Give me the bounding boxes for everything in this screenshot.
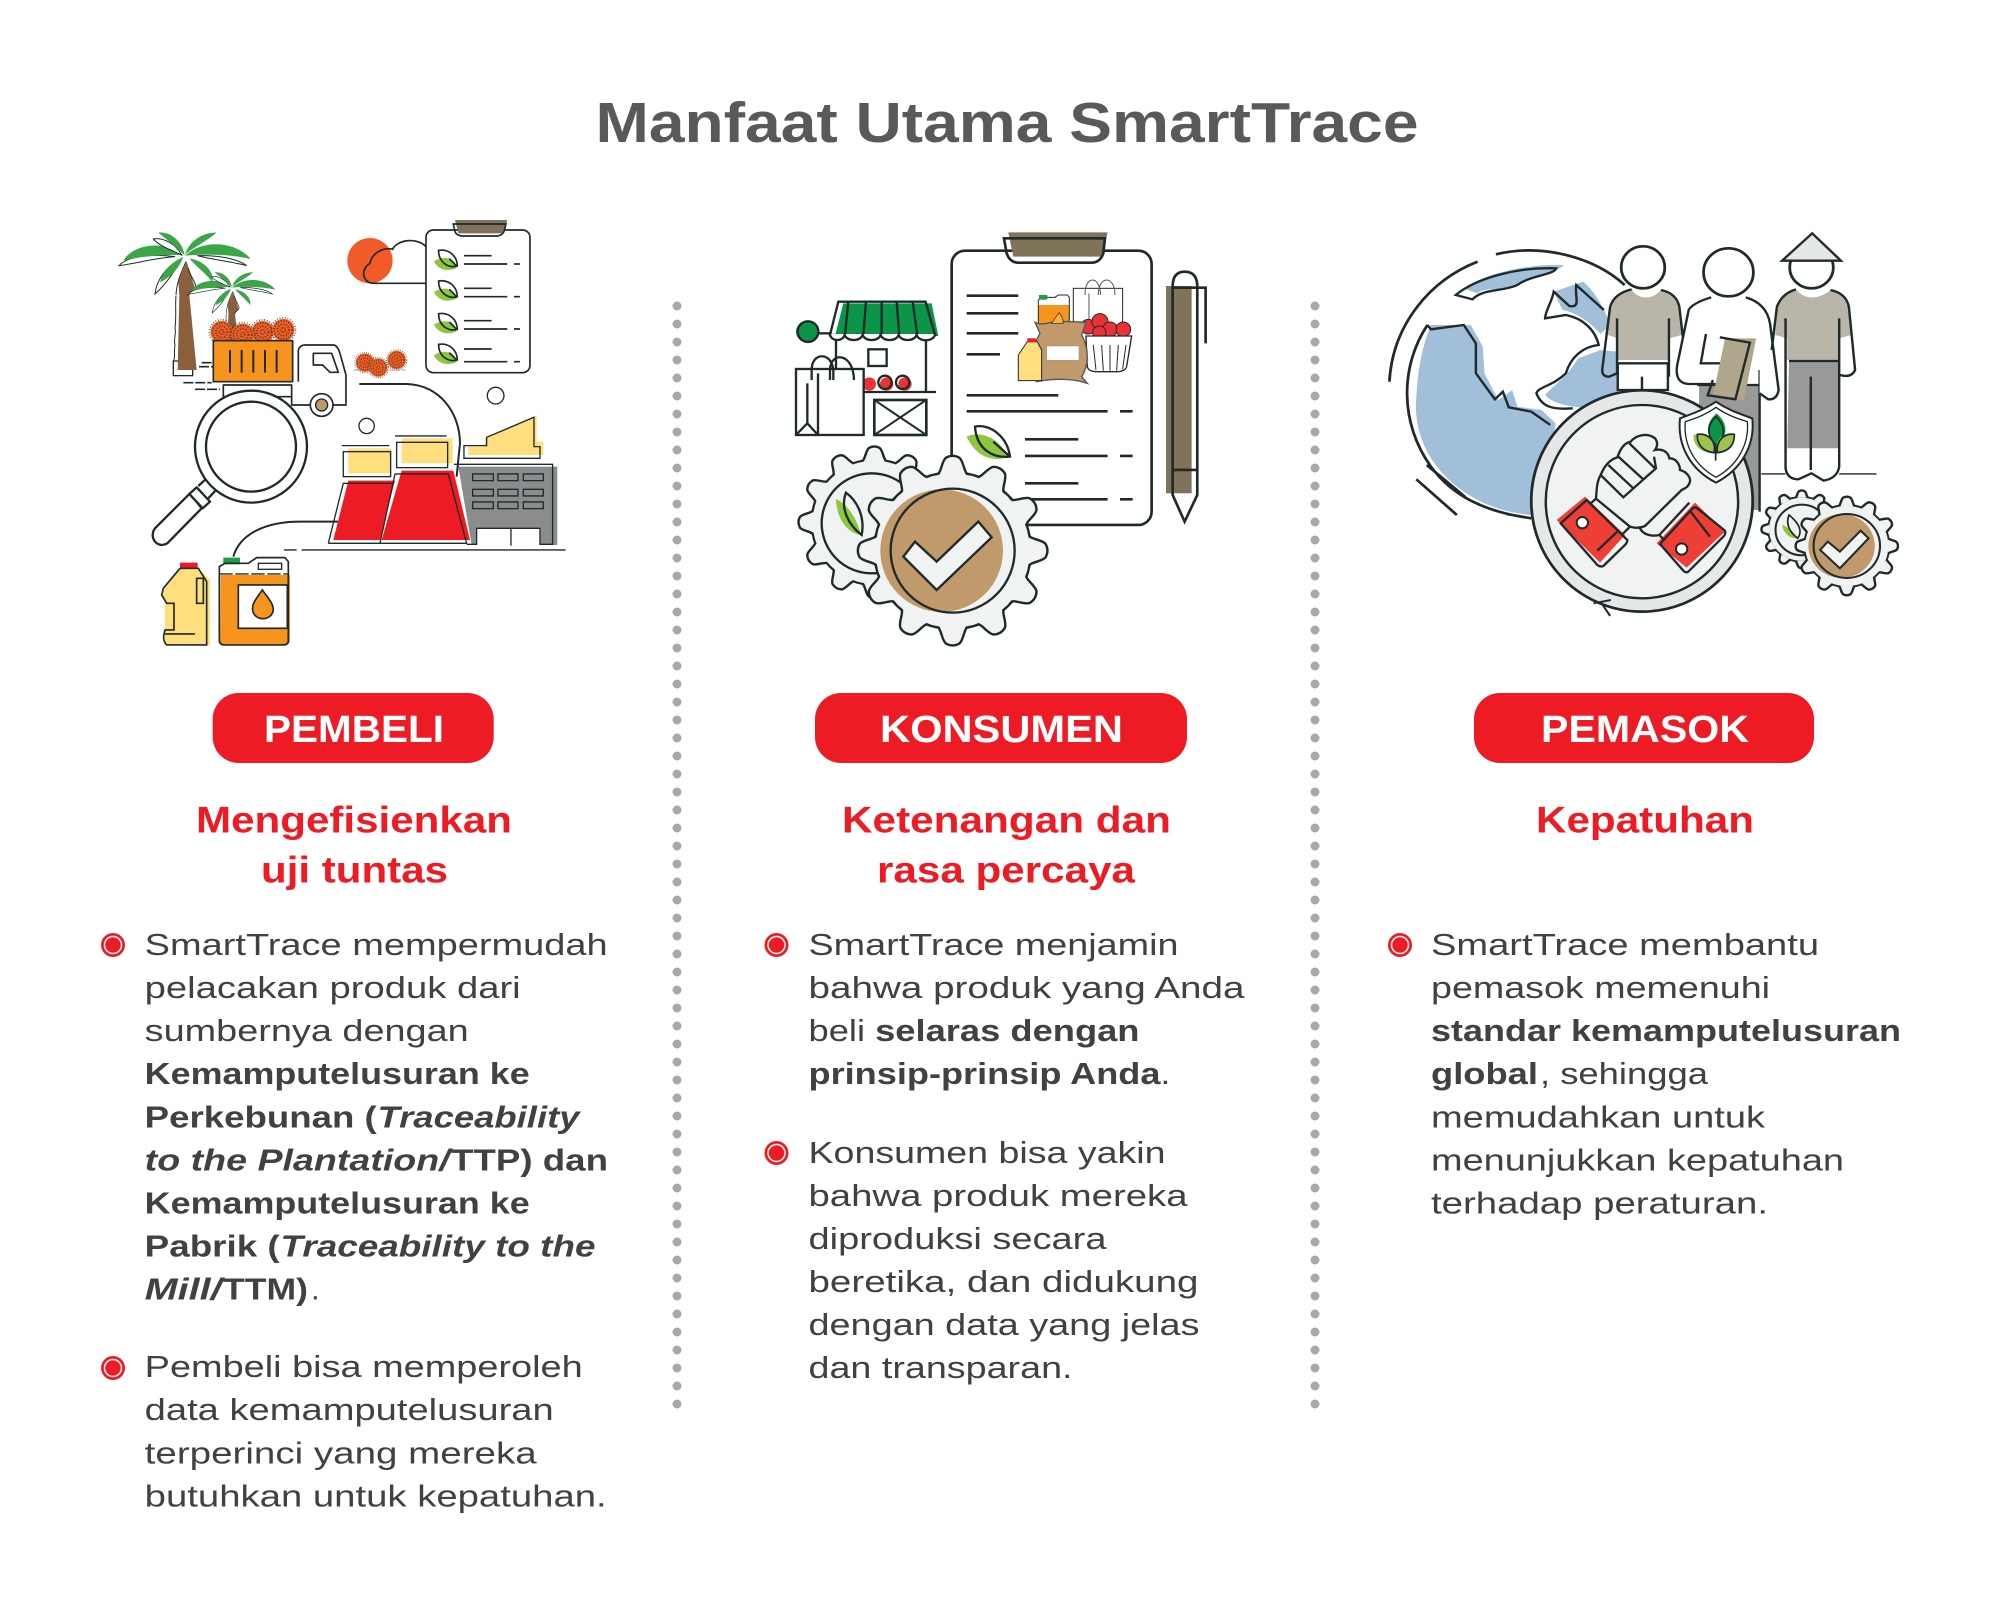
heading: mengefisienkan uji tuntas: uji tuntas — [261, 850, 448, 890]
bullet: konsumen 2: dengan data yang jelas — [808, 1307, 1200, 1342]
badge: konsumen: KONSUMEN — [880, 709, 1123, 751]
bullet: konsumen 2: beretika, dan didukung — [808, 1264, 1198, 1299]
icon: market stall — [796, 302, 938, 435]
bullet: pembeli 1: SmartTrace mempermudah — [145, 927, 608, 962]
icon: sun and cloud — [347, 238, 426, 283]
icon: connector pipes — [233, 384, 504, 557]
icon: cooking oil bottle — [162, 563, 210, 645]
bullet: pembeli 2: data kemamputelusuran — [145, 1392, 554, 1427]
illustration: palm oil supply chain — [119, 220, 566, 645]
bullet: pemasok 1 — [1388, 927, 1901, 1220]
panel: konsumen — [764, 232, 1245, 1385]
bullet: pemasok 1: SmartTrace membantu — [1431, 927, 1819, 962]
bullet: konsumen 2: Konsumen bisa yakin — [808, 1135, 1166, 1170]
heading: ketenangan dan rasa percaya: Ketenangan dan — [842, 800, 1171, 840]
icon: right cuff — [1657, 503, 1725, 572]
bullet: pembeli 1: Pabrik ( — [145, 1228, 280, 1264]
divider: right dotted line — [1310, 306, 1320, 1408]
bullet: pembeli 2: butuhkan untuk kepatuhan. — [145, 1478, 607, 1514]
bullet: konsumen 2: diproduksi secara — [808, 1221, 1107, 1256]
bullet: konsumen 1 — [764, 927, 1245, 1091]
bullet: pembeli 1: sumbernya dengan — [145, 1013, 469, 1048]
icon: globe — [1389, 250, 1625, 518]
bullet: pembeli 1: Traceability to the — [280, 1228, 596, 1264]
bullet: pemasok 1: memudahkan untuk — [1431, 1100, 1766, 1134]
bullet: pemasok 1: global — [1431, 1056, 1538, 1091]
icon: small gears with check mark — [1761, 490, 1898, 595]
bullet: konsumen 2 — [764, 1135, 1200, 1385]
bullet: pemasok 1: , sehingga — [1540, 1056, 1709, 1091]
bullet: pembeli 1: . — [311, 1272, 320, 1306]
bullet: pembeli 1: Kemamputelusuran ke — [145, 1186, 530, 1220]
bullet: konsumen 1: beli selaras dengan — [808, 1013, 1140, 1048]
bullet: pembeli 1 — [101, 927, 608, 1306]
panel: pembeli — [101, 220, 608, 1513]
icon: magnifying glass — [153, 391, 307, 545]
icon: sustainability shield — [1680, 402, 1753, 483]
badge: konsumen — [815, 693, 1187, 763]
bullet: konsumen 1: SmartTrace menjamin — [808, 927, 1178, 962]
bullet: konsumen 1: prinsip-prinsip Anda . — [808, 1056, 1170, 1091]
title: Manfaat Utama SmartTrace — [596, 91, 1418, 155]
icon: left cuff — [1557, 497, 1627, 566]
bullet: pemasok 1: terhadap peraturan. — [1431, 1186, 1768, 1220]
icon: oil jerry can — [219, 558, 290, 645]
bullet: konsumen 2: bahwa produk mereka — [808, 1178, 1188, 1213]
bullet: pemasok 1: menunjukkan kepatuhan — [1431, 1142, 1844, 1178]
icon: partnership circle — [1531, 390, 1753, 616]
bullet: konsumen 2: dan transparan. — [808, 1350, 1072, 1385]
heading: ketenangan dan rasa percaya — [842, 800, 1171, 890]
heading: kepatuhan: Kepatuhan — [1536, 800, 1754, 840]
icon: front gear with check mark — [858, 456, 1047, 645]
icon: pen — [1166, 272, 1206, 522]
bullet: pembeli 2: terperinci yang mereka — [145, 1436, 538, 1470]
bullet: konsumen 1: bahwa produk yang Anda — [808, 970, 1245, 1005]
bullet: pembeli 2: Pembeli bisa memperoleh — [145, 1349, 583, 1384]
badge: pemasok — [1474, 693, 1814, 763]
illustration: global suppliers — [1389, 233, 1898, 616]
icon: product group — [1018, 280, 1132, 383]
illustration: traceable products — [796, 232, 1206, 645]
icon: clasped hands — [1590, 435, 1690, 540]
icon: palm trees — [119, 233, 275, 376]
heading: mengefisienkan uji tuntas — [196, 800, 512, 890]
icon: handshake and shield — [1557, 402, 1753, 572]
panel: pemasok — [1388, 233, 1901, 1220]
badge: pembeli: PEMBELI — [264, 709, 444, 751]
divider: left dotted line — [672, 306, 682, 1408]
bullet: pembeli 1: to the Plantation/ — [145, 1142, 454, 1178]
heading: mengefisienkan uji tuntas: Mengefisienkan — [196, 800, 512, 840]
bullet: pemasok 1: standar kemamputelusuran — [1431, 1013, 1901, 1048]
bullet: pemasok 1: pemasok memenuhi — [1431, 970, 1770, 1005]
badge: pembeli — [213, 693, 494, 763]
icon: loose palm fruit — [353, 350, 407, 378]
bullet: pembeli 1: Traceability — [378, 1100, 582, 1134]
icon: palm oil mill — [284, 415, 566, 550]
icon: checklist clipboard — [426, 220, 530, 373]
bullet: pembeli 1: TTM) — [223, 1272, 308, 1306]
bullet: pembeli 1: Mill/ — [145, 1272, 226, 1306]
bullet: pembeli 1: Perkebunan ( — [145, 1100, 377, 1134]
bullet: pembeli 2 — [101, 1349, 607, 1514]
icon: back gear with leaf — [798, 446, 950, 598]
icon: three workers — [1602, 233, 1877, 512]
icon: truck with palm fruit — [183, 318, 346, 416]
badge: pemasok: PEMASOK — [1541, 709, 1750, 751]
icon: clipboard with list — [952, 232, 1152, 525]
bullet: pembeli 1: pelacakan produk dari — [145, 970, 521, 1005]
bullet: pembeli 1: TTP) dan — [451, 1142, 608, 1178]
bullet: pembeli 1: Kemamputelusuran ke — [145, 1056, 530, 1091]
heading: ketenangan dan rasa percaya: rasa percaya — [877, 850, 1135, 890]
